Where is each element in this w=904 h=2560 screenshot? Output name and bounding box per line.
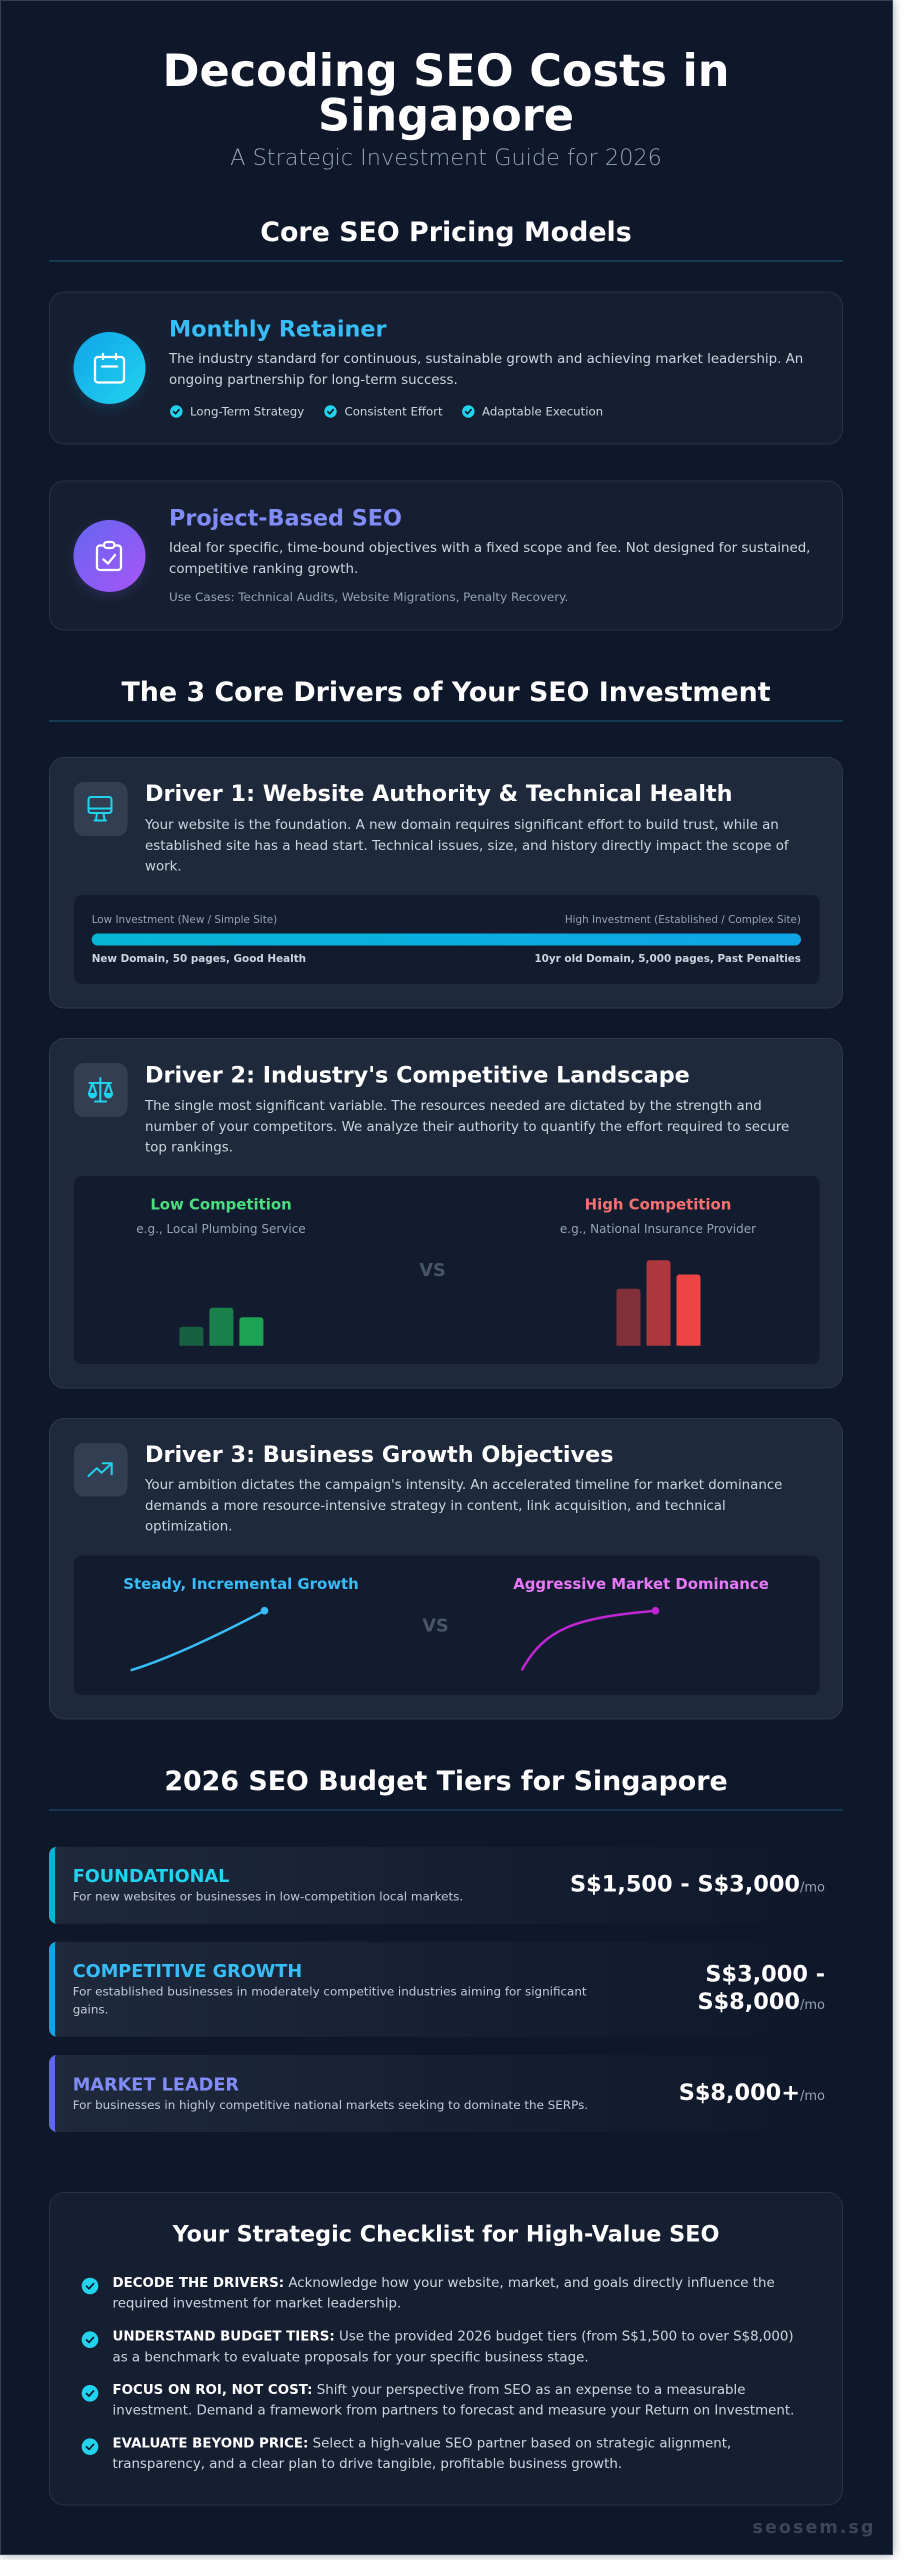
checklist item 1: DECODE THE DRIVERS: Acknowledge how your website, market, and goals directly influence the	[112, 2276, 775, 2291]
title	[162, 45, 730, 142]
investment scale chart: High Investment (Established / Complex Site)	[565, 914, 801, 926]
heading: driver 2: Driver 2: Industry's Competitive Landscape	[145, 1063, 690, 1089]
tier: competitive growth	[49, 1942, 843, 2037]
tier: foundational	[49, 1847, 843, 1924]
checklist item 1	[82, 2276, 775, 2312]
icon: clipboard	[74, 520, 146, 595]
text: monthly retainer description: ongoing partnership for long-term success.	[169, 373, 458, 388]
steady growth line: Steady, Incremental Growth	[123, 1575, 359, 1593]
investment scale chart: New Domain, 50 pages, Good Health	[92, 953, 306, 965]
heading: core drivers: The 3 Core Drivers of Your SEO Investment	[121, 677, 771, 708]
high competition column: e.g., National Insurance Provider	[560, 1222, 756, 1236]
checklist item 3: FOCUS ON ROI, NOT COST: Shift your perspective from SEO as an expense to a measurable	[112, 2383, 745, 2398]
investment scale chart	[74, 895, 820, 984]
investment scale chart: Low Investment (New / Simple Site)	[92, 914, 277, 926]
text: driver 3 description: demands a more resource-intensive strategy in content, link acquisition, and technical	[145, 1499, 726, 1514]
competition comparison chart	[74, 1176, 820, 1364]
panel: driver 2	[50, 1038, 842, 1388]
tier: market leader: For businesses in highly competitive national markets seeking to dominate the SERPs.	[73, 2098, 588, 2112]
vs label: VS	[422, 1617, 449, 1637]
text: driver 2 description: number of your competitors. We analyze their authority to quantify the effort required to secure	[145, 1120, 789, 1135]
text: driver 3 description	[144, 1478, 782, 1535]
text: driver 1 description	[144, 818, 789, 875]
checklist item 2: UNDERSTAND BUDGET TIERS: Use the provided 2026 budget tiers (from S$1,500 to over S$8,000)	[112, 2329, 794, 2344]
panel: project-based seo	[50, 481, 842, 630]
feature list: Consistent Effort	[344, 404, 443, 418]
text: monthly retainer description: The industry standard for continuous, sustainable growth and achieving market leadership. An	[168, 352, 803, 367]
panel: driver 1	[50, 758, 842, 1008]
title: Decoding SEO Costs in	[162, 45, 730, 97]
text: driver 2 description: top rankings.	[145, 1141, 233, 1156]
aggressive growth line: Aggressive Market Dominance	[513, 1575, 769, 1593]
icon: trending up	[74, 1443, 128, 1496]
title: Singapore	[318, 90, 574, 142]
panel: driver 3	[50, 1418, 842, 1719]
low competition column: e.g., Local Plumbing Service	[136, 1222, 306, 1236]
text: driver 3 description: optimization.	[145, 1520, 232, 1535]
tier: competitive growth: S$8,000/mo	[697, 1989, 825, 2015]
high competition column: High Competition	[585, 1196, 731, 1214]
icon: scales	[74, 1063, 128, 1117]
tier: foundational: For new websites or businesses in low-competition local markets.	[73, 1890, 463, 1904]
checklist item 4: EVALUATE BEYOND PRICE: Select a high-value SEO partner based on strategic alignment,	[112, 2436, 731, 2451]
heading: checklist: Your Strategic Checklist for High-Value SEO	[172, 2222, 719, 2248]
low competition column: Low Competition	[150, 1196, 292, 1214]
low competition column	[136, 1196, 306, 1346]
tier: competitive growth: S$3,000 -	[705, 1962, 825, 1988]
tier: market leader	[49, 2055, 843, 2132]
steady growth line	[123, 1575, 359, 1670]
text: project-based description: competitive ranking growth.	[169, 562, 358, 577]
tier: competitive growth: gains.	[73, 2002, 108, 2016]
vs label: VS	[419, 1261, 446, 1281]
investment scale chart: 10yr old Domain, 5,000 pages, Past Penalties	[534, 953, 801, 965]
watermark: seosem.sg	[753, 2518, 876, 2538]
checklist item 4: transparency, and a clear plan to drive tangible, profitable business growth.	[112, 2457, 622, 2472]
heading: driver 3: Driver 3: Business Growth Objectives	[145, 1442, 613, 1468]
heading: monthly retainer: Monthly Retainer	[169, 317, 386, 343]
text: project-based description	[169, 541, 810, 577]
text: driver 3 description: Your ambition dictates the campaign's intensity. An accelerated timeline for market dominance	[144, 1478, 782, 1493]
heading: budget tiers: 2026 SEO Budget Tiers for Singapore	[164, 1766, 728, 1797]
high competition column	[560, 1196, 756, 1346]
panel: monthly retainer	[50, 292, 842, 444]
tier: foundational: FOUNDATIONAL	[73, 1867, 229, 1887]
text: monthly retainer description	[168, 352, 803, 388]
text: driver 1 description: established site has a head start. Technical issues, size, and history directly impact the scope of	[145, 839, 789, 854]
text: driver 1 description: Your website is the foundation. A new domain requires significant effort to build trust, while an	[144, 818, 779, 833]
subtitle: A Strategic Investment Guide for 2026	[230, 145, 662, 171]
text: driver 2 description	[144, 1099, 789, 1156]
text: use cases: Use Cases: Technical Audits, Website Migrations, Penalty Recovery.	[169, 590, 568, 604]
heading: project-based seo: Project-Based SEO	[169, 505, 402, 531]
icon: calendar	[74, 332, 146, 407]
growth comparison chart	[74, 1556, 820, 1695]
checklist item 2: as a benchmark to evaluate proposals for your specific business stage.	[112, 2350, 589, 2365]
heading: pricing models: Core SEO Pricing Models	[260, 217, 632, 248]
checklist item 3: investment. Demand a framework from partners to forecast and measure your Return on Investment.	[112, 2404, 794, 2419]
checklist item 4	[82, 2436, 731, 2472]
checklist item 1: required investment for market leadership.	[112, 2297, 401, 2312]
heading: driver 1: Driver 1: Website Authority & Technical Health	[145, 781, 733, 807]
checklist item 2	[82, 2329, 794, 2365]
tier: competitive growth: COMPETITIVE GROWTH	[73, 1962, 302, 1982]
panel: strategic checklist	[50, 2192, 842, 2505]
tier: competitive growth: For established businesses in moderately competitive industries aiming for significant	[73, 1985, 587, 1999]
tier: foundational: S$1,500 - S$3,000/mo	[570, 1872, 825, 1898]
aggressive growth line	[513, 1575, 769, 1670]
checklist item 3	[82, 2383, 794, 2419]
feature list: Adaptable Execution	[482, 404, 603, 418]
feature list	[170, 404, 603, 418]
tier: market leader: S$8,000+/mo	[679, 2080, 825, 2106]
icon: monitor	[74, 782, 128, 836]
text: project-based description: Ideal for specific, time-bound objectives with a fixed scope and fee. Not designed for sustained,	[169, 541, 810, 556]
text: driver 2 description: The single most significant variable. The resources needed are dictated by the strength and	[144, 1099, 762, 1114]
text: driver 1 description: work.	[145, 860, 182, 875]
tier: market leader: MARKET LEADER	[73, 2076, 239, 2096]
feature list: Long-Term Strategy	[190, 404, 304, 418]
